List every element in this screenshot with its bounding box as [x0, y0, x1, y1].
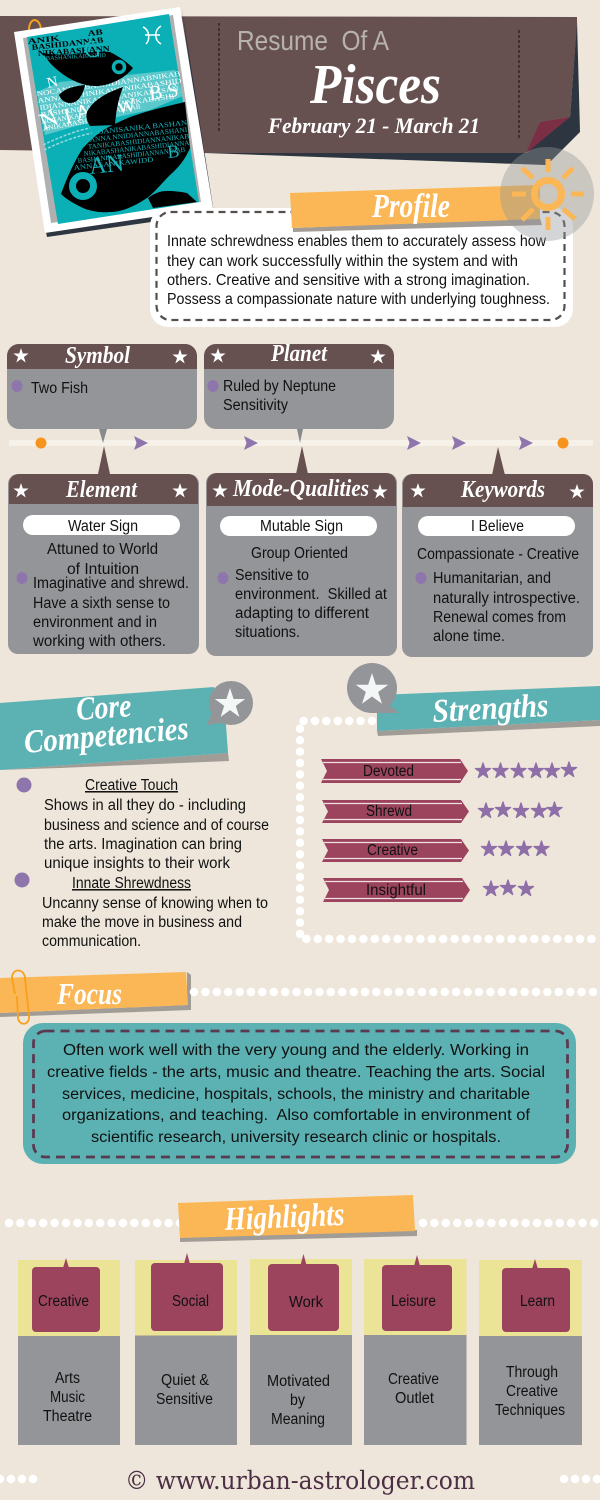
illustration: top fish: G [84, 37, 101, 63]
panel: profile [150, 208, 573, 327]
card: keywords: Keywords [460, 477, 545, 503]
header titles: Pisces [309, 54, 441, 116]
illustration: top fish [27, 27, 133, 86]
card: mode-qualities [206, 473, 397, 656]
text block: core competencies: communication. [42, 933, 141, 950]
column: creative: Theatre [43, 1408, 92, 1425]
column: social: Social [172, 1293, 209, 1310]
card: element: Have a sixth sense to [33, 595, 170, 612]
card: element: of Intuition [67, 561, 139, 578]
card: element: Imaginative and shrewd. [33, 575, 189, 592]
illustration: bottom fish: I: OANISANIKA BASHAN [89, 119, 188, 137]
card: keywords: Compassionate - Creative [417, 546, 579, 563]
panel: focus [23, 1023, 576, 1164]
header titles [219, 23, 519, 140]
texture: white lettering band: I A [61, 98, 94, 129]
column: learn: Creative [506, 1383, 558, 1400]
ribbon: insightful: Insightful [366, 882, 426, 899]
stars: insightful rating [483, 880, 534, 895]
card: keywords: naturally introspective. [433, 590, 580, 607]
heading: highlights: Highlights [223, 1197, 345, 1238]
stars: shrewd rating [478, 802, 562, 817]
ribbon: shrewd [322, 800, 469, 823]
column: learn [479, 1259, 582, 1445]
card: keywords: Renewal comes from [433, 609, 566, 626]
header banner [0, 16, 580, 165]
heading: strengths: Strengths [432, 688, 549, 730]
column: leisure: Outlet [395, 1390, 435, 1407]
card: element: Water Sign [68, 518, 138, 535]
column: leisure: Creative [388, 1371, 439, 1388]
texture: white lettering band: ANIKABASHIANNA [42, 113, 112, 133]
card: element: working with others. [32, 633, 166, 650]
column: creative: Creative [38, 1293, 89, 1310]
illustration: bottom fish: B [166, 141, 180, 162]
texture: white lettering band: B S [148, 79, 180, 105]
card: symbol: Two Fish [31, 380, 88, 397]
column: work: by [290, 1392, 305, 1409]
card: mode-qualities: Sensitive to [235, 567, 309, 584]
card: symbol [7, 343, 197, 429]
heading: core competencies [0, 687, 229, 770]
column: creative: Music [50, 1389, 85, 1406]
column: social [135, 1253, 237, 1445]
illustration: top fish: ANIK [27, 34, 61, 46]
icon: star callout right [347, 663, 399, 713]
texture: white lettering band [36, 70, 183, 150]
panel: focus: Often work well with the very young and the elderly. Working in [63, 1042, 529, 1059]
panel: focus: services, medicine, hospitals, schools, the ministry and charitable [62, 1086, 530, 1103]
column: creative [18, 1258, 120, 1445]
text block: core competencies [14, 777, 269, 950]
ribbon: devoted: Devoted [363, 763, 414, 780]
panel: focus: creative fields - the arts, music and theatre. Teaching the arts. Social [47, 1064, 545, 1081]
card: keywords [402, 474, 593, 657]
illustration: top fish: BASHANIKABASHID [46, 53, 107, 62]
ribbon: creative [322, 839, 469, 862]
texture: white lettering band: ANNABASHNIKAWSNIKABASHID [37, 77, 182, 105]
illustration: top fish: BASHIDANNAB [31, 35, 105, 52]
illustration: bottom fish: BASHANIKABASHIDIANNANIKAB [77, 146, 186, 165]
text block: core competencies: Shows in all they do - including [44, 797, 246, 814]
panel: profile: Innate schrewdness enables them to accurately assess how [167, 233, 547, 250]
heading: core competencies: Competencies [23, 711, 190, 761]
photo: pisces poster [14, 7, 214, 237]
column: social: Quiet & [161, 1372, 210, 1389]
column: work [250, 1254, 352, 1445]
icon: paperclip [12, 970, 29, 1024]
texture: white lettering band: N [36, 105, 62, 135]
heading: focus [0, 972, 191, 1017]
ribbon: devoted [321, 759, 468, 783]
texture: white lettering band: IDIANNANIKABASHANIKABASAN [39, 85, 179, 112]
card: mode-qualities: environment. Skilled at [235, 586, 388, 603]
text block: core competencies: the arts. Imagination can bring [44, 836, 242, 853]
ribbon: shrewd: Shrewd [366, 803, 412, 820]
column: learn: Techniques [495, 1402, 565, 1419]
card: element: Element [65, 477, 138, 503]
column: learn: Learn [520, 1293, 555, 1310]
column: work: Motivated [267, 1373, 330, 1390]
panel: focus: scientific research, university research clinic or hospitals. [91, 1129, 501, 1146]
text block: core competencies: unique insights to their work [44, 855, 230, 872]
card: keywords: alone time. [433, 628, 505, 645]
card: planet [204, 341, 394, 429]
highlights dotted line [9, 1219, 600, 1227]
icon: star callout left [207, 681, 253, 725]
illustration: bottom fish [61, 102, 197, 212]
illustration: top fish: AB [87, 27, 104, 38]
profile heading ribbon [290, 185, 542, 232]
texture: white lettering band: W [115, 94, 138, 119]
texture: white lettering band: NOCANIKABASHIDIANNABNIKAB [36, 70, 181, 98]
chart: strengths ribbons [321, 759, 577, 902]
panel: strengths dotted frame [300, 721, 600, 939]
column: social: Sensitive [156, 1391, 213, 1408]
stars: creative rating [481, 841, 549, 855]
column: work: Meaning [271, 1411, 325, 1428]
illustration: bottom fish: TANIKABASHIDIANNANIKAB [87, 132, 190, 151]
illustration: top fish: NIKABASHANN [38, 44, 110, 58]
ribbon: creative: Creative [367, 842, 418, 859]
icon: pisces symbol [143, 26, 161, 44]
texture: white lettering band: NOCANIKABASHANIKANNAB [41, 102, 141, 126]
profile heading ribbon: Profile [371, 188, 450, 225]
header titles: February 21 - March 21 [267, 113, 480, 138]
heading: core competencies: Core [75, 688, 132, 728]
panel: profile: Possess a compassionate nature with underlying toughness. [167, 291, 550, 308]
text block: core competencies: business and science and of course [44, 817, 269, 834]
column: work: Work [289, 1294, 323, 1311]
card: keywords: Humanitarian, and [433, 570, 551, 587]
text block: core competencies: make the move in business and [42, 914, 242, 931]
timeline [9, 429, 593, 475]
card: mode-qualities: Mode-Qualities [232, 476, 369, 502]
card: planet: Ruled by Neptune [223, 378, 336, 395]
texture: white lettering band: N [46, 74, 60, 92]
column: learn: Through [506, 1364, 558, 1381]
card: element [8, 474, 199, 654]
card: element: Attuned to World [47, 541, 158, 558]
card: element: environment and in [33, 614, 157, 631]
illustration: bottom fish: AN [88, 150, 125, 180]
card: mode-qualities: Mutable Sign [260, 518, 343, 535]
text block: core competencies: Innate Shrewdness [72, 875, 191, 892]
column: leisure [364, 1255, 466, 1445]
header titles: Resume Of A [237, 25, 389, 56]
card: mode-qualities: adapting to different [235, 605, 370, 622]
ribbon: insightful [323, 878, 470, 902]
text block: core competencies: Uncanny sense of knowing when to [42, 895, 268, 912]
text block: core competencies: Creative Touch [85, 777, 178, 794]
stars: devoted rating [475, 762, 577, 777]
panel: profile: they can work successfully within the system and with [167, 253, 518, 270]
texture: white lettering band: BASHANIKAIDANNANIKABASHI [40, 92, 176, 119]
illustration: bottom fish: ANNA NNIDIANNABASHANI [89, 126, 188, 144]
heading: focus: Focus [56, 976, 122, 1011]
focus dotted line [194, 988, 600, 996]
card: mode-qualities: Group Oriented [251, 545, 348, 562]
heading: strengths [377, 686, 600, 736]
illustration: bottom fish: NIKABASHANIKABASHIDIANNA [83, 139, 190, 158]
card: planet: Sensitivity [223, 397, 288, 414]
illustration: bottom fish: ANNASANIKAWIDD [73, 156, 154, 172]
card: keywords: I Believe [471, 518, 524, 535]
heading: highlights [178, 1195, 417, 1242]
footer: © www.urban-astrologer.com [125, 1466, 475, 1495]
card: planet: Planet [270, 341, 328, 367]
column: leisure: Leisure [391, 1293, 436, 1310]
illustration: tail fins [59, 85, 123, 126]
panel: profile: others. Creative and sensitive with a strong imagination. [167, 272, 530, 289]
panel: focus: organizations, and teaching. Also comfortable in environment of [62, 1107, 531, 1124]
column: creative: Arts [55, 1370, 80, 1387]
card: mode-qualities: situations. [235, 624, 300, 641]
card: symbol: Symbol [65, 343, 130, 369]
icon: sun [500, 147, 594, 241]
paperclip: photo clip [29, 20, 43, 38]
